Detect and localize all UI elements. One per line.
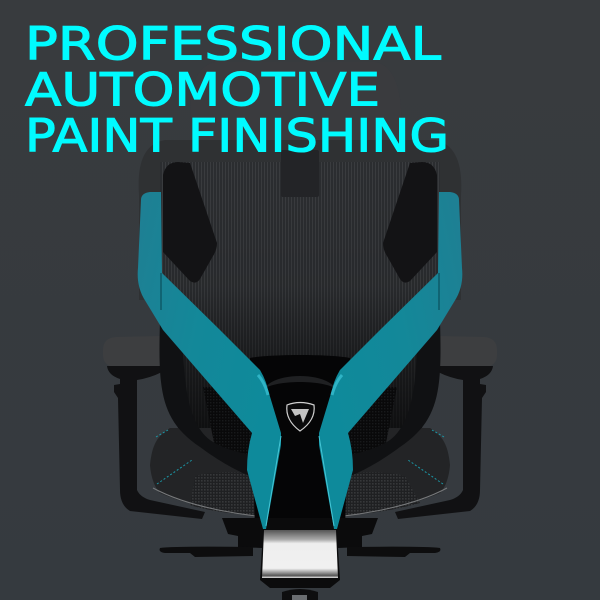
- right side panel: [383, 162, 437, 283]
- left side panel: [163, 162, 217, 283]
- central spine: [250, 355, 350, 530]
- logo shield: [287, 402, 314, 431]
- office chair: [103, 62, 497, 600]
- title: [25, 18, 449, 162]
- title line 3: PAINT FINISHING: [25, 110, 449, 162]
- seat cushion: [150, 428, 450, 519]
- seat underside mechanism: [222, 518, 378, 588]
- right armrest: [395, 336, 497, 519]
- right base bar: [347, 547, 440, 557]
- lower back black frame: [159, 320, 441, 480]
- stitching: [156, 430, 444, 484]
- seat mesh band: [190, 472, 420, 517]
- left teal details: [160, 273, 162, 310]
- title line 2: AUTOMOTIVE: [25, 64, 380, 116]
- base column: [282, 589, 318, 600]
- headrest: [190, 62, 401, 140]
- back mesh: [160, 162, 440, 440]
- back frame: [139, 140, 461, 300]
- headrest post: [281, 150, 319, 197]
- lumbar support: [203, 387, 397, 470]
- spine arc: [265, 376, 335, 388]
- right teal details: [438, 273, 440, 310]
- title line 1: PROFESSIONAL: [25, 18, 441, 70]
- left armrest: [103, 336, 205, 519]
- chrome lever: [262, 530, 338, 578]
- right teal frame: [319, 192, 462, 529]
- left base bar: [160, 547, 253, 557]
- left teal frame: [138, 192, 281, 529]
